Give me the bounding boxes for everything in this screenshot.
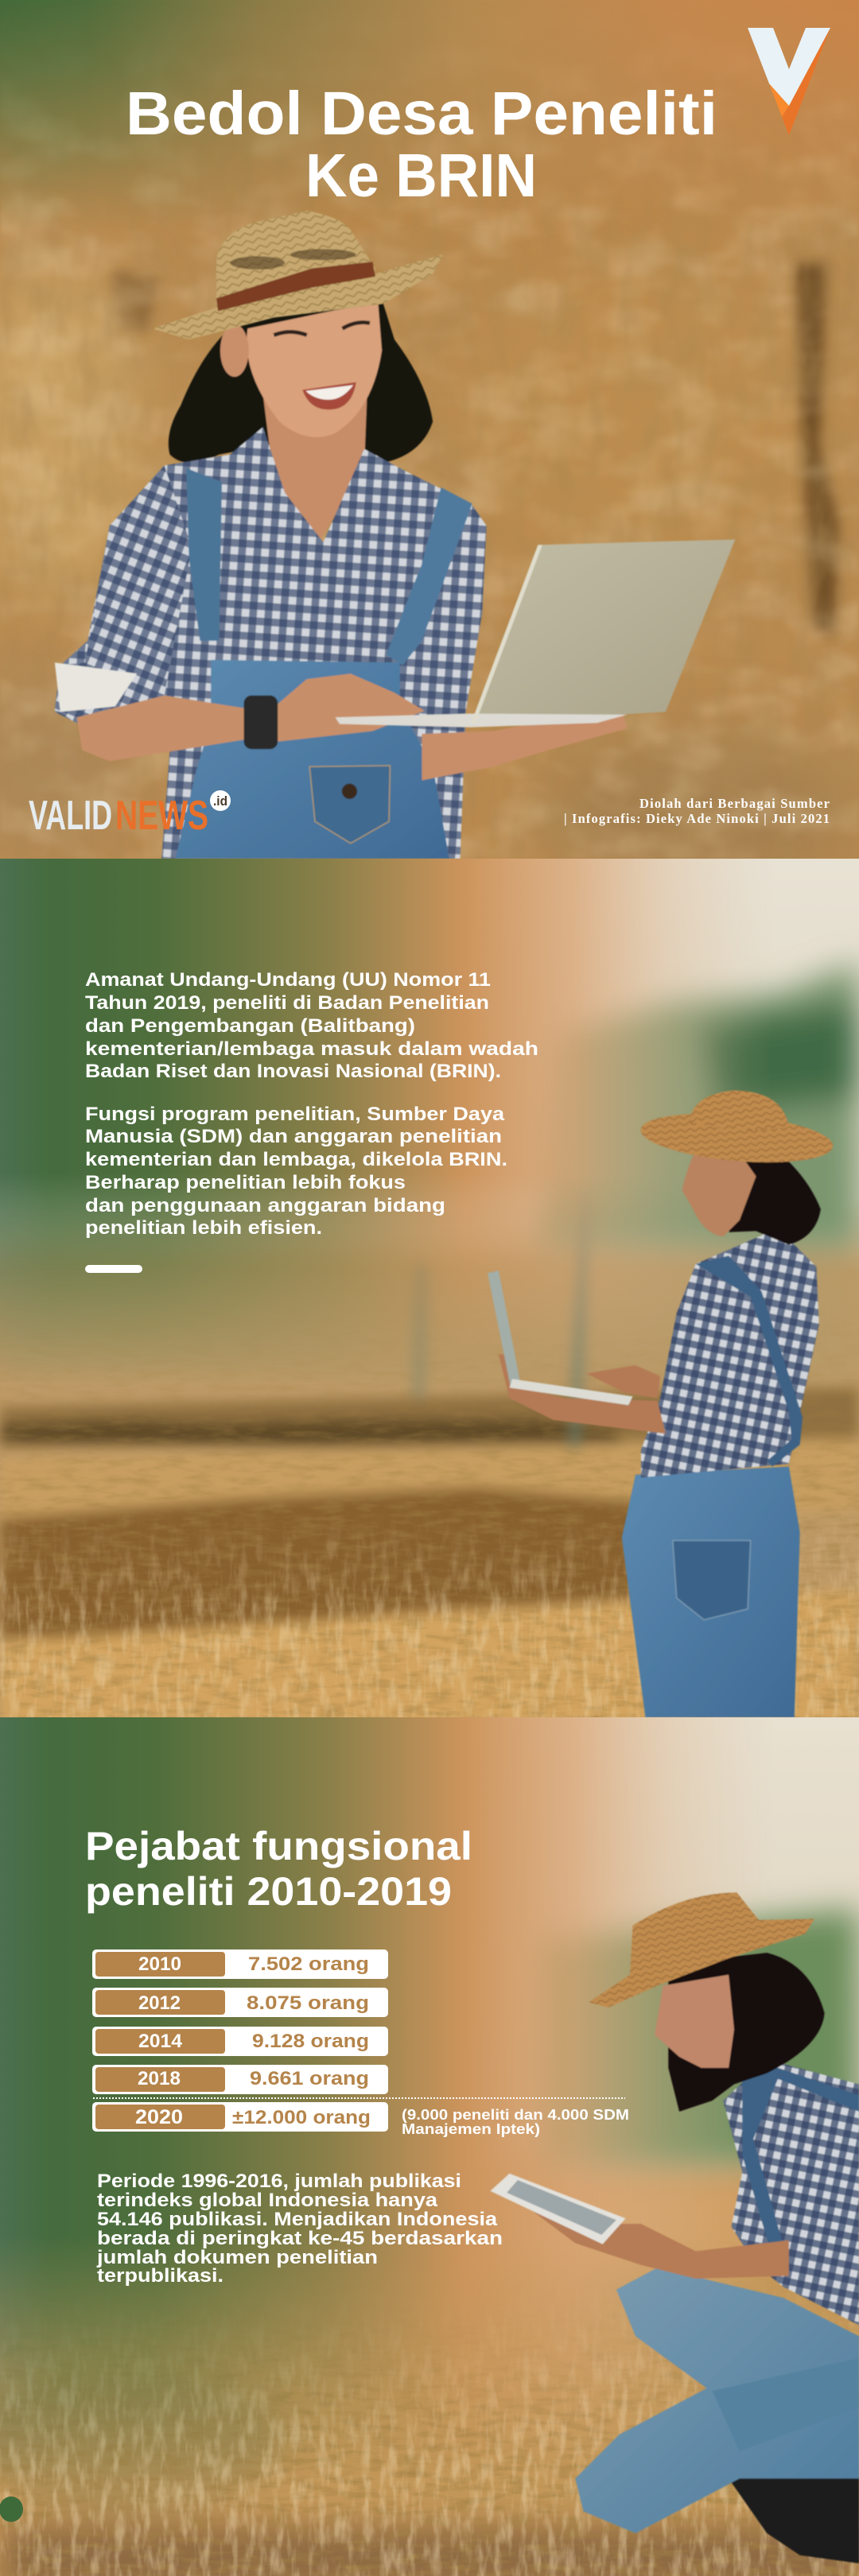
publication text: terpublikasi. <box>97 2265 223 2287</box>
title: Ke BRIN <box>305 142 537 210</box>
gradient overlay <box>0 1717 859 2481</box>
photo: woman kneeling with tablet <box>490 1892 859 2563</box>
Validnews logo <box>29 790 231 839</box>
row 2012: 8.075 orang <box>247 1992 369 2014</box>
neck and face <box>263 394 367 539</box>
jeans <box>622 1467 800 1717</box>
jeans <box>575 2268 859 2533</box>
publication text: Periode 1996-2016, jumlah publikasi <box>97 2171 461 2192</box>
publication text <box>96 2171 503 2287</box>
photo: woman standing with laptop <box>488 1090 835 1717</box>
row 2010: 2010 <box>138 1953 181 1975</box>
paragraph 1: dan Pengembangan (Balitbang) <box>85 1015 415 1037</box>
row 2012 <box>92 1988 388 2017</box>
publication text: terindeks global Indonesia hanya <box>97 2190 438 2211</box>
note: (9.000 peneliti dan 4.000 SDM <box>402 2107 629 2123</box>
plaid shirt <box>723 2059 859 2326</box>
plaid shirt <box>55 427 487 859</box>
panel: amanat UU text <box>0 859 859 1725</box>
Validnews logo: .id <box>213 793 227 809</box>
paragraph 1: Amanat Undang-Undang (UU) Nomor 11 <box>85 969 491 991</box>
hat <box>639 1107 835 1170</box>
title <box>126 80 717 210</box>
row 2018: 9.661 orang <box>250 2068 369 2089</box>
laptop <box>488 1271 520 1387</box>
plaid shirt <box>641 1228 819 1477</box>
hair and face <box>717 1143 821 1245</box>
heading: Pejabat fungsional <box>85 1824 472 1868</box>
photo background: hay bales <box>0 67 859 859</box>
table: researcher counts <box>92 1949 625 2132</box>
hair <box>169 296 433 463</box>
source credit: Diolah dari Berbagai Sumber <box>639 796 830 811</box>
row 2020: ±12.000 orang <box>232 2107 371 2128</box>
row 2020 <box>92 2102 388 2132</box>
row 2010: 7.502 orang <box>248 1953 369 1975</box>
arms and hand <box>76 673 425 761</box>
sprout <box>0 2496 23 2522</box>
photo: woman with laptop <box>55 296 735 859</box>
publication text: jumlah dokumen penelitian <box>96 2247 378 2268</box>
note <box>402 2107 629 2137</box>
paragraph 2 <box>85 1104 507 1239</box>
overall strap <box>696 1255 803 1467</box>
forearm <box>531 2210 789 2279</box>
row 2014 <box>92 2027 388 2056</box>
gradient overlay <box>0 859 859 1383</box>
title: Bedol Desa Peneliti <box>126 80 717 148</box>
row 2018 <box>92 2065 388 2094</box>
photo background: field <box>0 859 859 1725</box>
paragraph 2: kementerian dan lembaga, dikelola BRIN. <box>85 1149 507 1170</box>
icon: V logo <box>748 28 830 135</box>
row 2014: 2014 <box>138 2031 183 2052</box>
hat <box>589 1892 814 2008</box>
tablet <box>490 2174 626 2244</box>
paragraph 1 <box>85 969 538 1082</box>
paragraph 2: Manusia (SDM) dan anggaran penelitian <box>85 1126 502 1147</box>
top colour gradient <box>0 0 859 231</box>
paragraph 1: kementerian/lembaga masuk dalam wadah <box>85 1038 538 1060</box>
accent bar <box>85 1265 142 1273</box>
paragraph 1: Tahun 2019, peneliti di Badan Penelitian <box>85 992 489 1014</box>
row 2012: 2012 <box>138 1992 181 2014</box>
smartwatch <box>244 696 278 749</box>
heading: peneliti 2010-2019 <box>85 1869 452 1914</box>
source credit: | Infografis: Dieky Ade Ninoki | Juli 2021 <box>564 811 830 826</box>
photo background: field with straw <box>0 1717 859 2576</box>
panel: pejabat fungsional <box>0 1717 859 2576</box>
row 2018: 2018 <box>138 2068 181 2089</box>
row 2014: 9.128 orang <box>252 2031 369 2052</box>
paragraph 1: Badan Riset dan Inovasi Nasional (BRIN). <box>85 1061 501 1082</box>
paragraph 2: dan penggunaan anggaran bidang <box>85 1195 445 1216</box>
Validnews logo: VALID <box>29 793 112 839</box>
arm <box>499 1354 666 1433</box>
laptop <box>471 539 735 723</box>
denim overalls <box>175 660 449 859</box>
straw hat <box>152 211 443 339</box>
row 2010 <box>92 1949 388 1979</box>
paragraph 2: penelitian lebih efisien. <box>85 1217 322 1239</box>
typing hand <box>586 1365 660 1398</box>
hair and face <box>668 1953 825 2112</box>
publication text: 54.146 publikasi. Menjadikan Indonesia <box>97 2209 498 2230</box>
paragraph 2: Fungsi program penelitian, Sumber Daya <box>85 1104 505 1125</box>
publication text: berada di peringkat ke-45 berdasarkan <box>97 2228 503 2249</box>
Validnews logo: NEWS <box>115 793 208 839</box>
paragraph 2: Berharap penelitian lebih fokus <box>85 1172 406 1193</box>
panel: title cover <box>0 0 859 890</box>
heading <box>85 1824 472 1914</box>
row 2020: 2020 <box>135 2106 183 2128</box>
boots <box>729 2462 859 2563</box>
source credit <box>564 796 830 826</box>
note: Manajemen Iptek) <box>402 2121 540 2137</box>
